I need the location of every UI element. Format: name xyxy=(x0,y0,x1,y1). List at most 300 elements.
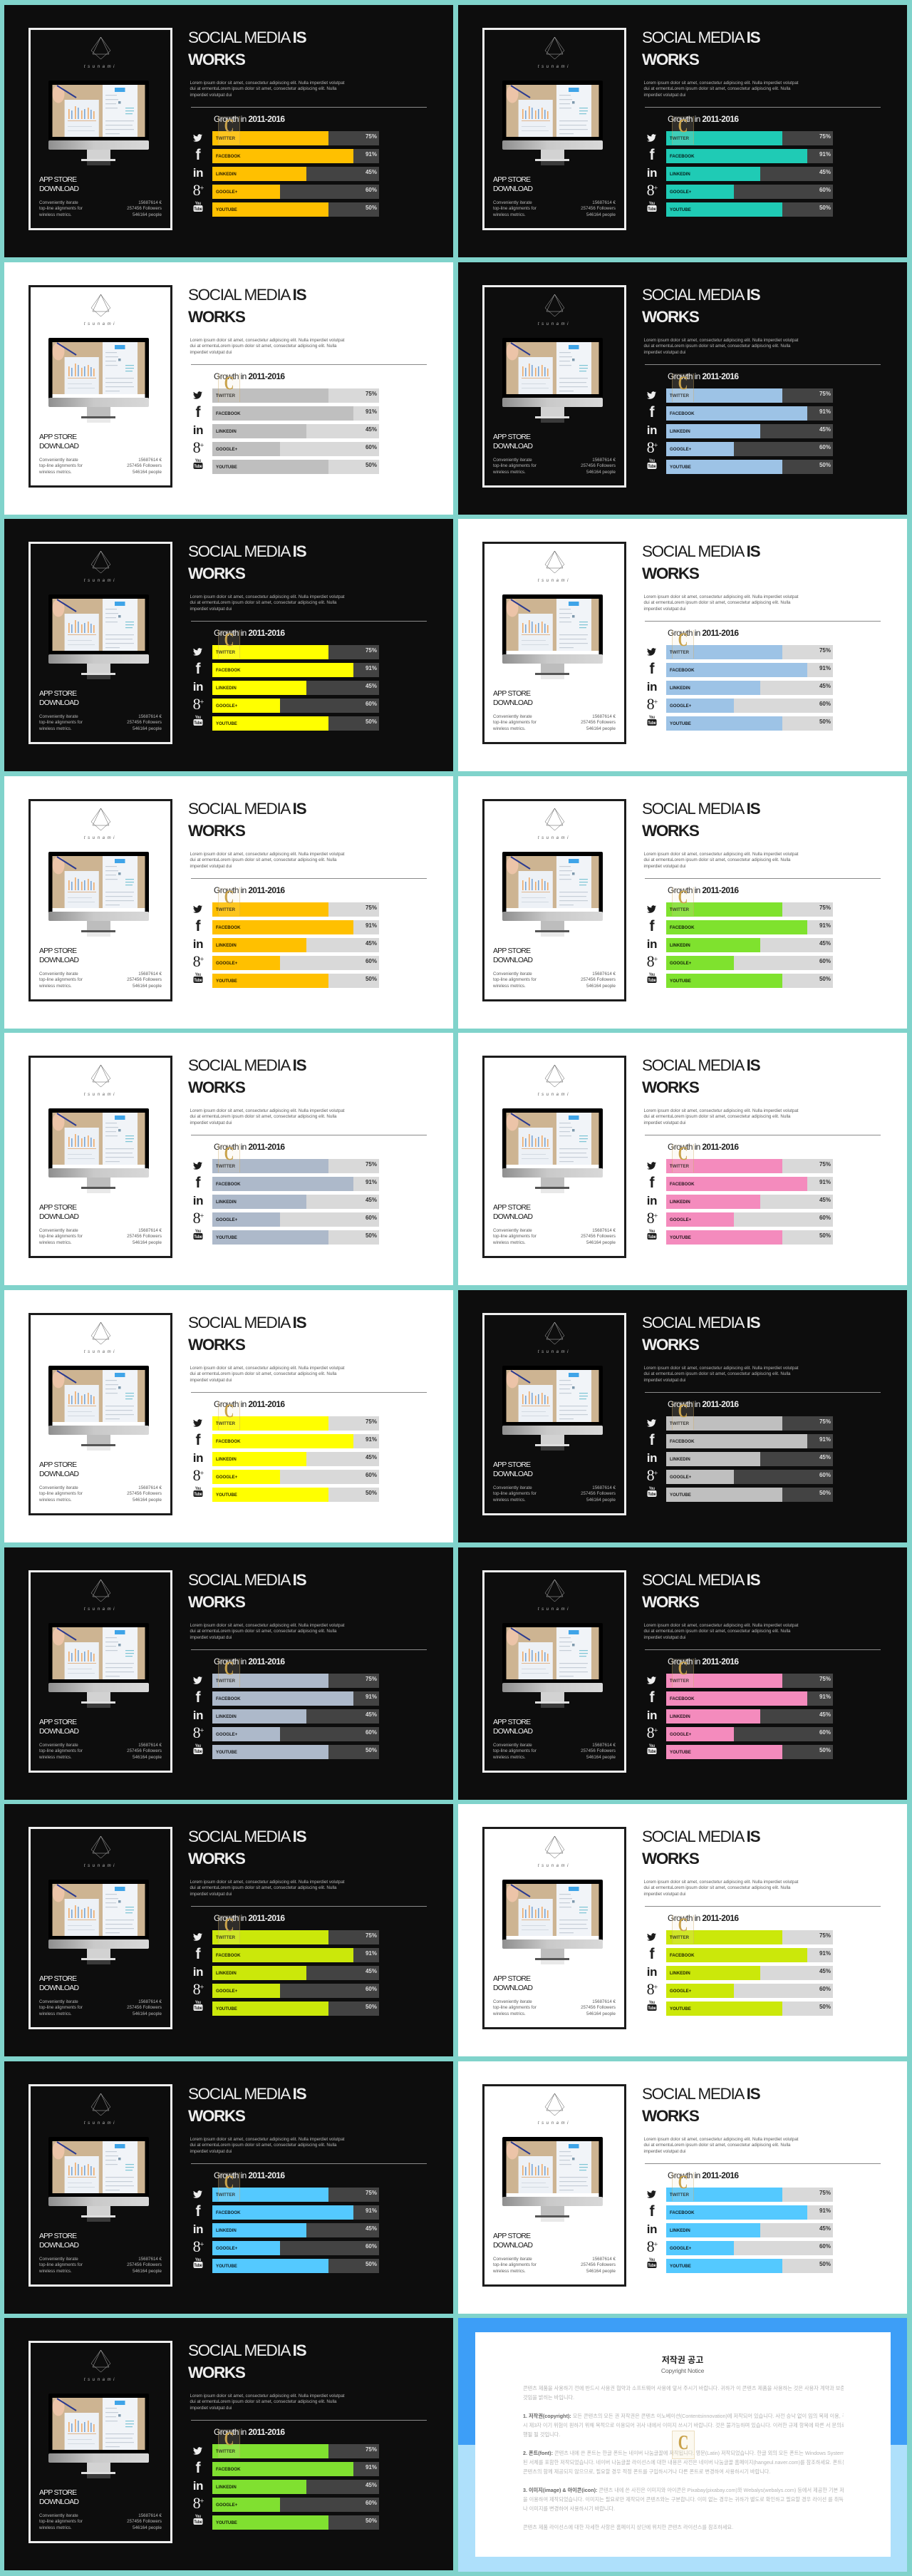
panel: dark slide lime xyxy=(4,1804,453,2056)
bar chart: FACEBOOK xyxy=(670,411,695,416)
bar chart: TWITTER xyxy=(670,2193,689,2198)
bar chart: FACEBOOK xyxy=(216,1182,241,1187)
bar chart: 8+ xyxy=(193,181,203,199)
bar chart: 91% xyxy=(819,1436,831,1443)
bar chart: LINKEDIN xyxy=(216,1457,237,1462)
bar chart: 45% xyxy=(366,1197,377,1203)
bar chart: 75% xyxy=(819,647,831,654)
notice subtitle: Copyright Notice xyxy=(661,2367,704,2374)
bar chart: in xyxy=(193,2222,203,2236)
paragraph: dui at ermentuLorem ipsum dolor sit amet, consectetur adipiscing elit. Nulla xyxy=(644,1885,791,1890)
bar chart: in xyxy=(193,1451,203,1465)
heading: app store: APP STORE xyxy=(39,2232,76,2240)
paragraph xyxy=(644,80,799,98)
bar chart xyxy=(645,1154,833,1248)
notice body xyxy=(523,2384,844,2533)
bar chart: f xyxy=(195,147,201,163)
bar chart: 50% xyxy=(819,462,831,468)
bar chart: 45% xyxy=(819,2225,831,2232)
heading: app store: APP STORE xyxy=(493,690,530,698)
heading: app store: DOWNLOAD xyxy=(39,699,78,707)
bar chart: FACEBOOK xyxy=(670,1696,695,1701)
title xyxy=(188,2083,306,2127)
heading: app store xyxy=(39,1974,78,1993)
heading: app store: DOWNLOAD xyxy=(493,1728,532,1736)
stats xyxy=(127,458,162,475)
bar chart: 60% xyxy=(366,958,377,964)
description: top-line alignments for xyxy=(493,1234,537,1239)
bar chart: YOUTUBE xyxy=(216,1493,237,1498)
description xyxy=(493,200,537,217)
title xyxy=(642,29,760,68)
bar chart: 45% xyxy=(366,2225,377,2232)
bar chart: TWITTER xyxy=(216,907,235,912)
bar chart: 8+ xyxy=(647,1980,657,1998)
stats xyxy=(127,971,162,989)
stats xyxy=(127,1742,162,1761)
bar chart: LINKEDIN xyxy=(670,1200,690,1205)
paragraph: dui at ermentuLorem ipsum dolor sit amet, consectetur adipiscing elit. Nulla xyxy=(644,2143,791,2148)
description xyxy=(39,714,83,731)
paragraph: Lorem ipsum dolor sit amet, consectetur adipiscing elit. Nulla imperdiet volutpat xyxy=(190,2394,345,2398)
panel: copyright notice xyxy=(458,2318,907,2572)
wordmark: tsunami xyxy=(538,1607,571,1612)
description xyxy=(493,458,537,475)
paragraph: Lorem ipsum dolor sit amet, consectetur adipiscing elit. Nulla imperdiet volutpat xyxy=(190,2137,345,2141)
panel: white slide light blue xyxy=(458,519,907,771)
watermark xyxy=(218,1144,240,1173)
bar chart: in xyxy=(193,680,203,694)
title xyxy=(188,1568,306,1612)
icon: monitor xyxy=(48,2137,149,2222)
bar chart: LINKEDIN xyxy=(216,2228,237,2233)
chart title: Growth in 2011-2016 xyxy=(214,885,284,895)
bar chart: 75% xyxy=(819,1932,831,1939)
heading: app store: DOWNLOAD xyxy=(39,443,78,450)
heading: app store xyxy=(39,1718,78,1736)
bar chart xyxy=(191,1925,379,2019)
stats: 257456 Followers xyxy=(127,720,162,725)
title: SOCIAL MEDIA IS xyxy=(188,2084,306,2103)
bar chart xyxy=(645,897,833,991)
stats xyxy=(581,1485,616,1503)
bar chart: 45% xyxy=(819,683,831,689)
stats: 257456 Followers xyxy=(127,2262,162,2267)
description: top-line alignments for xyxy=(493,1491,537,1496)
stats: 257456 Followers xyxy=(127,2005,162,2010)
bar chart: YOUTUBE xyxy=(670,2264,691,2269)
title: SOCIAL MEDIA IS xyxy=(642,2084,760,2103)
heading: app store xyxy=(493,1974,532,1993)
bar chart: in xyxy=(647,2222,657,2236)
stats xyxy=(127,2257,162,2274)
wordmark: tsunami xyxy=(538,322,571,326)
stats: 257456 Followers xyxy=(581,720,616,725)
watermark: C xyxy=(678,2172,688,2193)
paragraph: dui at ermentuLorem ipsum dolor sit amet, consectetur adipiscing elit. Nulla xyxy=(644,1371,791,1376)
poster card xyxy=(482,542,626,744)
stats: 15687614 € xyxy=(138,1742,162,1748)
bar chart: FACEBOOK xyxy=(670,154,695,159)
chart title: Growth in 2011-2016 xyxy=(214,1399,284,1409)
title: SOCIAL MEDIA IS xyxy=(188,285,306,304)
title: WORKS xyxy=(188,2107,245,2124)
chart title: Growth in 2011-2016 xyxy=(668,1657,738,1666)
paragraph xyxy=(644,1366,799,1384)
bar chart: 60% xyxy=(366,187,377,193)
watermark xyxy=(672,116,694,145)
wordmark: tsunami xyxy=(538,836,571,840)
panel: dark slide yellow xyxy=(4,519,453,771)
bar chart: FACEBOOK xyxy=(670,1953,695,1958)
heading: app store xyxy=(39,690,78,707)
panel: white slide sky blue xyxy=(458,2061,907,2314)
bar chart xyxy=(191,1669,379,1763)
bar chart: LINKEDIN xyxy=(670,429,690,434)
stats: 15687614 € xyxy=(592,714,616,718)
bar chart: TWITTER xyxy=(670,907,689,912)
bar chart: 45% xyxy=(819,1454,831,1460)
paragraph xyxy=(190,338,345,355)
stats xyxy=(127,1999,162,2017)
bar chart: 50% xyxy=(819,1490,831,1496)
stats xyxy=(581,2257,616,2274)
chart title: Growth in 2011-2016 xyxy=(668,371,738,381)
bar chart: 45% xyxy=(366,1454,377,1460)
panel: dark slide grey xyxy=(458,1290,907,1542)
logo xyxy=(90,808,112,831)
paragraph: imperdiet volutpat dui xyxy=(190,2406,232,2411)
paragraph: dui at ermentuLorem ipsum dolor sit amet, consectetur adipiscing elit. Nulla xyxy=(190,600,337,605)
watermark xyxy=(218,1915,240,1944)
bar chart: 91% xyxy=(819,2207,831,2214)
watermark: C xyxy=(678,373,688,393)
bar chart: GOOGLE+ xyxy=(670,704,691,709)
bar chart: 60% xyxy=(819,1215,831,1221)
heading: app store xyxy=(39,433,78,450)
icon: monitor xyxy=(48,852,149,937)
bar chart: TWITTER xyxy=(216,1935,235,1940)
chart title: Growth in 2011-2016 xyxy=(214,371,284,381)
wordmark: tsunami xyxy=(538,65,571,69)
paragraph: dui at ermentuLorem ipsum dolor sit amet, consectetur adipiscing elit. Nulla xyxy=(190,1114,337,1119)
description: wireless metrics. xyxy=(39,1240,72,1245)
stats: 546164 people xyxy=(586,1498,616,1503)
icon: monitor xyxy=(502,81,603,165)
poster card xyxy=(28,1313,172,1515)
stats: 546164 people xyxy=(586,2269,616,2274)
bar chart xyxy=(191,2183,379,2277)
title xyxy=(642,797,760,841)
wordmark: tsunami xyxy=(84,1607,117,1612)
stats: 15687614 € xyxy=(592,1227,616,1233)
heading: app store: DOWNLOAD xyxy=(39,185,78,193)
bar chart: 50% xyxy=(366,718,377,725)
title: WORKS xyxy=(188,308,245,325)
description: Conveniently iterate xyxy=(39,458,78,462)
paragraph: imperdiet volutpat dui xyxy=(644,350,685,355)
bar chart: f xyxy=(650,147,654,163)
bar chart: FACEBOOK xyxy=(670,925,695,930)
watermark xyxy=(672,2173,694,2201)
bar chart: 91% xyxy=(366,2464,377,2471)
paragraph: dui at ermentuLorem ipsum dolor sit amet, consectetur adipiscing elit. Nulla xyxy=(190,86,337,91)
chart title: Growth in 2011-2016 xyxy=(668,885,738,895)
watermark xyxy=(218,2173,240,2201)
description: top-line alignments for xyxy=(493,2005,537,2010)
description xyxy=(39,2513,83,2531)
paragraph: Lorem ipsum dolor sit amet, consectetur adipiscing elit. Nulla imperdiet volutpat xyxy=(644,1108,799,1113)
stats: 15687614 € xyxy=(138,1999,162,2004)
stats xyxy=(127,2513,162,2531)
paragraph: dui at ermentuLorem ipsum dolor sit amet, consectetur adipiscing elit. Nulla xyxy=(644,1114,791,1119)
watermark xyxy=(218,116,240,145)
title xyxy=(642,1568,760,1612)
heading: app store xyxy=(493,176,533,193)
logo xyxy=(544,2093,566,2116)
paragraph: Lorem ipsum dolor sit amet, consectetur adipiscing elit. Nulla imperdiet volutpat xyxy=(190,851,345,857)
heading: app store: APP STORE xyxy=(39,176,76,184)
title: WORKS xyxy=(642,1078,698,1096)
bar chart: TWITTER xyxy=(670,136,689,141)
title: WORKS xyxy=(642,1592,698,1611)
paragraph: imperdiet volutpat dui xyxy=(190,1892,232,1897)
bar chart: 75% xyxy=(819,905,831,911)
stats: 546164 people xyxy=(586,470,616,475)
description: Conveniently iterate xyxy=(493,1485,532,1490)
bar chart: LINKEDIN xyxy=(216,686,237,691)
description xyxy=(493,1485,537,1503)
heading: app store: DOWNLOAD xyxy=(39,1213,78,1221)
chart title: Growth in 2011-2016 xyxy=(214,628,284,638)
description: top-line alignments for xyxy=(39,977,83,982)
panel: white slide grey xyxy=(4,262,453,515)
logo xyxy=(544,1064,566,1088)
paragraph xyxy=(644,1108,799,1127)
bar chart: f xyxy=(195,918,201,934)
description xyxy=(39,1742,83,1761)
bar chart: 91% xyxy=(366,1694,377,1700)
chart title: Growth in 2011-2016 xyxy=(668,114,738,124)
bar chart: GOOGLE+ xyxy=(670,190,691,195)
description: Conveniently iterate xyxy=(39,1485,78,1490)
stats xyxy=(581,1227,616,1246)
heading: app store: DOWNLOAD xyxy=(493,957,532,964)
bar chart xyxy=(193,388,379,474)
heading: app store: DOWNLOAD xyxy=(39,1470,78,1478)
bar chart: 91% xyxy=(366,151,377,158)
paragraph: imperdiet volutpat dui xyxy=(644,1120,685,1125)
icon: monitor xyxy=(502,1108,603,1194)
logo xyxy=(544,550,566,574)
bar chart: TWITTER xyxy=(216,2449,235,2454)
logo xyxy=(91,294,111,316)
wordmark: tsunami xyxy=(84,2121,117,2126)
watermark xyxy=(218,630,240,659)
watermark: C xyxy=(678,2432,688,2454)
notice body: 행될 될 것입니다. xyxy=(523,2431,560,2438)
icon: monitor xyxy=(502,1366,603,1451)
heading: app store xyxy=(493,2232,532,2250)
bar chart: TWITTER xyxy=(670,393,689,398)
heading: app store: DOWNLOAD xyxy=(493,1984,532,1992)
bar chart: GOOGLE+ xyxy=(216,1475,237,1480)
watermark xyxy=(672,887,694,916)
bar chart: GOOGLE+ xyxy=(670,1732,691,1737)
description: top-line alignments for xyxy=(39,1491,83,1496)
description: wireless metrics. xyxy=(493,726,526,731)
bar chart: GOOGLE+ xyxy=(216,1989,237,1994)
title: WORKS xyxy=(188,1592,245,1611)
panel: white slide amber xyxy=(4,776,453,1029)
bar chart: LINKEDIN xyxy=(670,943,690,948)
wordmark: tsunami xyxy=(84,1864,117,1868)
bar chart xyxy=(647,388,833,474)
description: wireless metrics. xyxy=(39,2269,72,2274)
bar chart: 75% xyxy=(819,2190,831,2196)
heading: app store: DOWNLOAD xyxy=(493,1470,532,1478)
paragraph: dui at ermentuLorem ipsum dolor sit amet, consectetur adipiscing elit. Nulla xyxy=(190,2143,337,2148)
heading: app store: APP STORE xyxy=(39,1204,76,1212)
bar chart: 8+ xyxy=(193,695,203,713)
bar chart: 60% xyxy=(366,1986,377,1992)
panel: white slide blue-grey xyxy=(4,1033,453,1285)
bar chart: LINKEDIN xyxy=(216,943,237,948)
description: top-line alignments for xyxy=(493,1748,537,1753)
icon: monitor xyxy=(48,1366,149,1451)
paragraph xyxy=(644,594,799,613)
bar chart: 60% xyxy=(366,2500,377,2506)
paragraph: Lorem ipsum dolor sit amet, consectetur adipiscing elit. Nulla imperdiet volutpat xyxy=(190,1108,345,1113)
paragraph: dui at ermentuLorem ipsum dolor sit amet, consectetur adipiscing elit. Nulla xyxy=(190,2399,337,2404)
paragraph: Lorem ipsum dolor sit amet, consectetur adipiscing elit. Nulla imperdiet volutpat xyxy=(644,594,799,599)
stats xyxy=(581,200,616,217)
paragraph: imperdiet volutpat dui xyxy=(190,607,232,612)
paragraph xyxy=(644,1622,799,1642)
watermark: C xyxy=(224,1915,234,1935)
bar chart: 75% xyxy=(819,1161,831,1168)
bar chart: in xyxy=(647,1965,657,1979)
paragraph: Lorem ipsum dolor sit amet, consectetur adipiscing elit. Nulla imperdiet volutpat xyxy=(190,338,345,342)
heading: app store xyxy=(39,947,78,965)
stats xyxy=(581,1999,616,2017)
logo xyxy=(91,37,111,60)
stats: 15687614 € xyxy=(138,458,162,462)
watermark: C xyxy=(678,1143,688,1164)
bar chart: LINKEDIN xyxy=(670,686,690,691)
watermark xyxy=(672,1659,694,1687)
bar chart: YOUTUBE xyxy=(670,1750,691,1755)
bar chart: LINKEDIN xyxy=(670,1971,690,1976)
wordmark: tsunami xyxy=(538,2121,571,2126)
bar chart: YOUTUBE xyxy=(670,465,691,470)
description: top-line alignments for xyxy=(39,2262,83,2267)
poster card xyxy=(482,1056,626,1258)
icon: monitor xyxy=(502,1623,603,1709)
stats: 546164 people xyxy=(586,1755,616,1760)
title: SOCIAL MEDIA IS xyxy=(188,29,306,46)
stats: 257456 Followers xyxy=(581,1748,616,1753)
panel: dark slide pink xyxy=(458,1547,907,1800)
paragraph: imperdiet volutpat dui xyxy=(644,1892,685,1897)
poster card xyxy=(28,285,172,488)
description: top-line alignments for xyxy=(493,206,537,211)
description xyxy=(39,1485,83,1503)
poster card xyxy=(28,799,172,1001)
bar chart: 50% xyxy=(819,1232,831,1239)
title: WORKS xyxy=(188,821,245,840)
notice title: 저작권 공고 xyxy=(662,2355,703,2365)
bar chart: 60% xyxy=(819,187,831,193)
panel: dark slide sky blue xyxy=(4,2061,453,2314)
bar chart xyxy=(645,2183,833,2277)
watermark: C xyxy=(678,1915,688,1935)
heading: app store xyxy=(493,947,532,965)
stats: 15687614 € xyxy=(592,2257,616,2261)
bar chart: 75% xyxy=(366,1418,377,1425)
stats: 546164 people xyxy=(133,2269,162,2274)
paragraph xyxy=(190,1879,345,1898)
bar chart: FACEBOOK xyxy=(216,1953,241,1958)
paragraph: Lorem ipsum dolor sit amet, consectetur adipiscing elit. Nulla imperdiet volutpat xyxy=(644,851,799,857)
title: SOCIAL MEDIA IS xyxy=(188,800,306,817)
bar chart: FACEBOOK xyxy=(216,2210,241,2215)
bar chart: GOOGLE+ xyxy=(216,704,237,709)
poster card xyxy=(28,2084,172,2287)
stats xyxy=(581,714,616,732)
paragraph xyxy=(644,338,799,355)
description: top-line alignments for xyxy=(39,2519,83,2524)
stats: 15687614 € xyxy=(138,714,162,718)
title xyxy=(188,1053,306,1098)
icon: monitor xyxy=(502,338,603,423)
heading: app store xyxy=(39,176,78,193)
bar chart: 8+ xyxy=(647,952,657,970)
bar chart: 60% xyxy=(819,1986,831,1992)
stats: 546164 people xyxy=(586,212,616,217)
bar chart: 45% xyxy=(366,2482,377,2488)
wordmark: tsunami xyxy=(538,579,571,583)
bar chart: GOOGLE+ xyxy=(216,447,237,452)
chart title: Growth in 2011-2016 xyxy=(214,114,284,124)
description: Conveniently iterate xyxy=(493,2257,532,2261)
paragraph: imperdiet volutpat dui xyxy=(644,2149,685,2154)
bar chart xyxy=(645,640,833,734)
logo xyxy=(90,1579,112,1602)
bar chart: 60% xyxy=(366,1215,377,1221)
bar chart: LINKEDIN xyxy=(216,429,237,434)
watermark xyxy=(672,1144,694,1173)
bar chart: TWITTER xyxy=(670,1421,689,1426)
poster card xyxy=(482,799,626,1001)
watermark xyxy=(672,1915,694,1944)
stats: 15687614 € xyxy=(138,1485,162,1490)
notice card xyxy=(475,2332,891,2557)
heading: app store: DOWNLOAD xyxy=(39,2498,78,2506)
title: WORKS xyxy=(642,308,698,325)
bar chart: 50% xyxy=(366,2518,377,2524)
bar chart: 91% xyxy=(819,408,831,415)
stats: 546164 people xyxy=(586,726,616,731)
stats: 257456 Followers xyxy=(127,206,162,211)
bar chart: 60% xyxy=(819,2243,831,2250)
bar chart xyxy=(647,131,833,217)
watermark xyxy=(218,373,240,402)
description xyxy=(39,971,83,989)
paragraph: dui at ermentuLorem ipsum dolor sit amet, consectetur adipiscing elit. Nulla xyxy=(644,1629,791,1634)
description xyxy=(39,1999,83,2017)
heading: app store: APP STORE xyxy=(39,433,76,441)
